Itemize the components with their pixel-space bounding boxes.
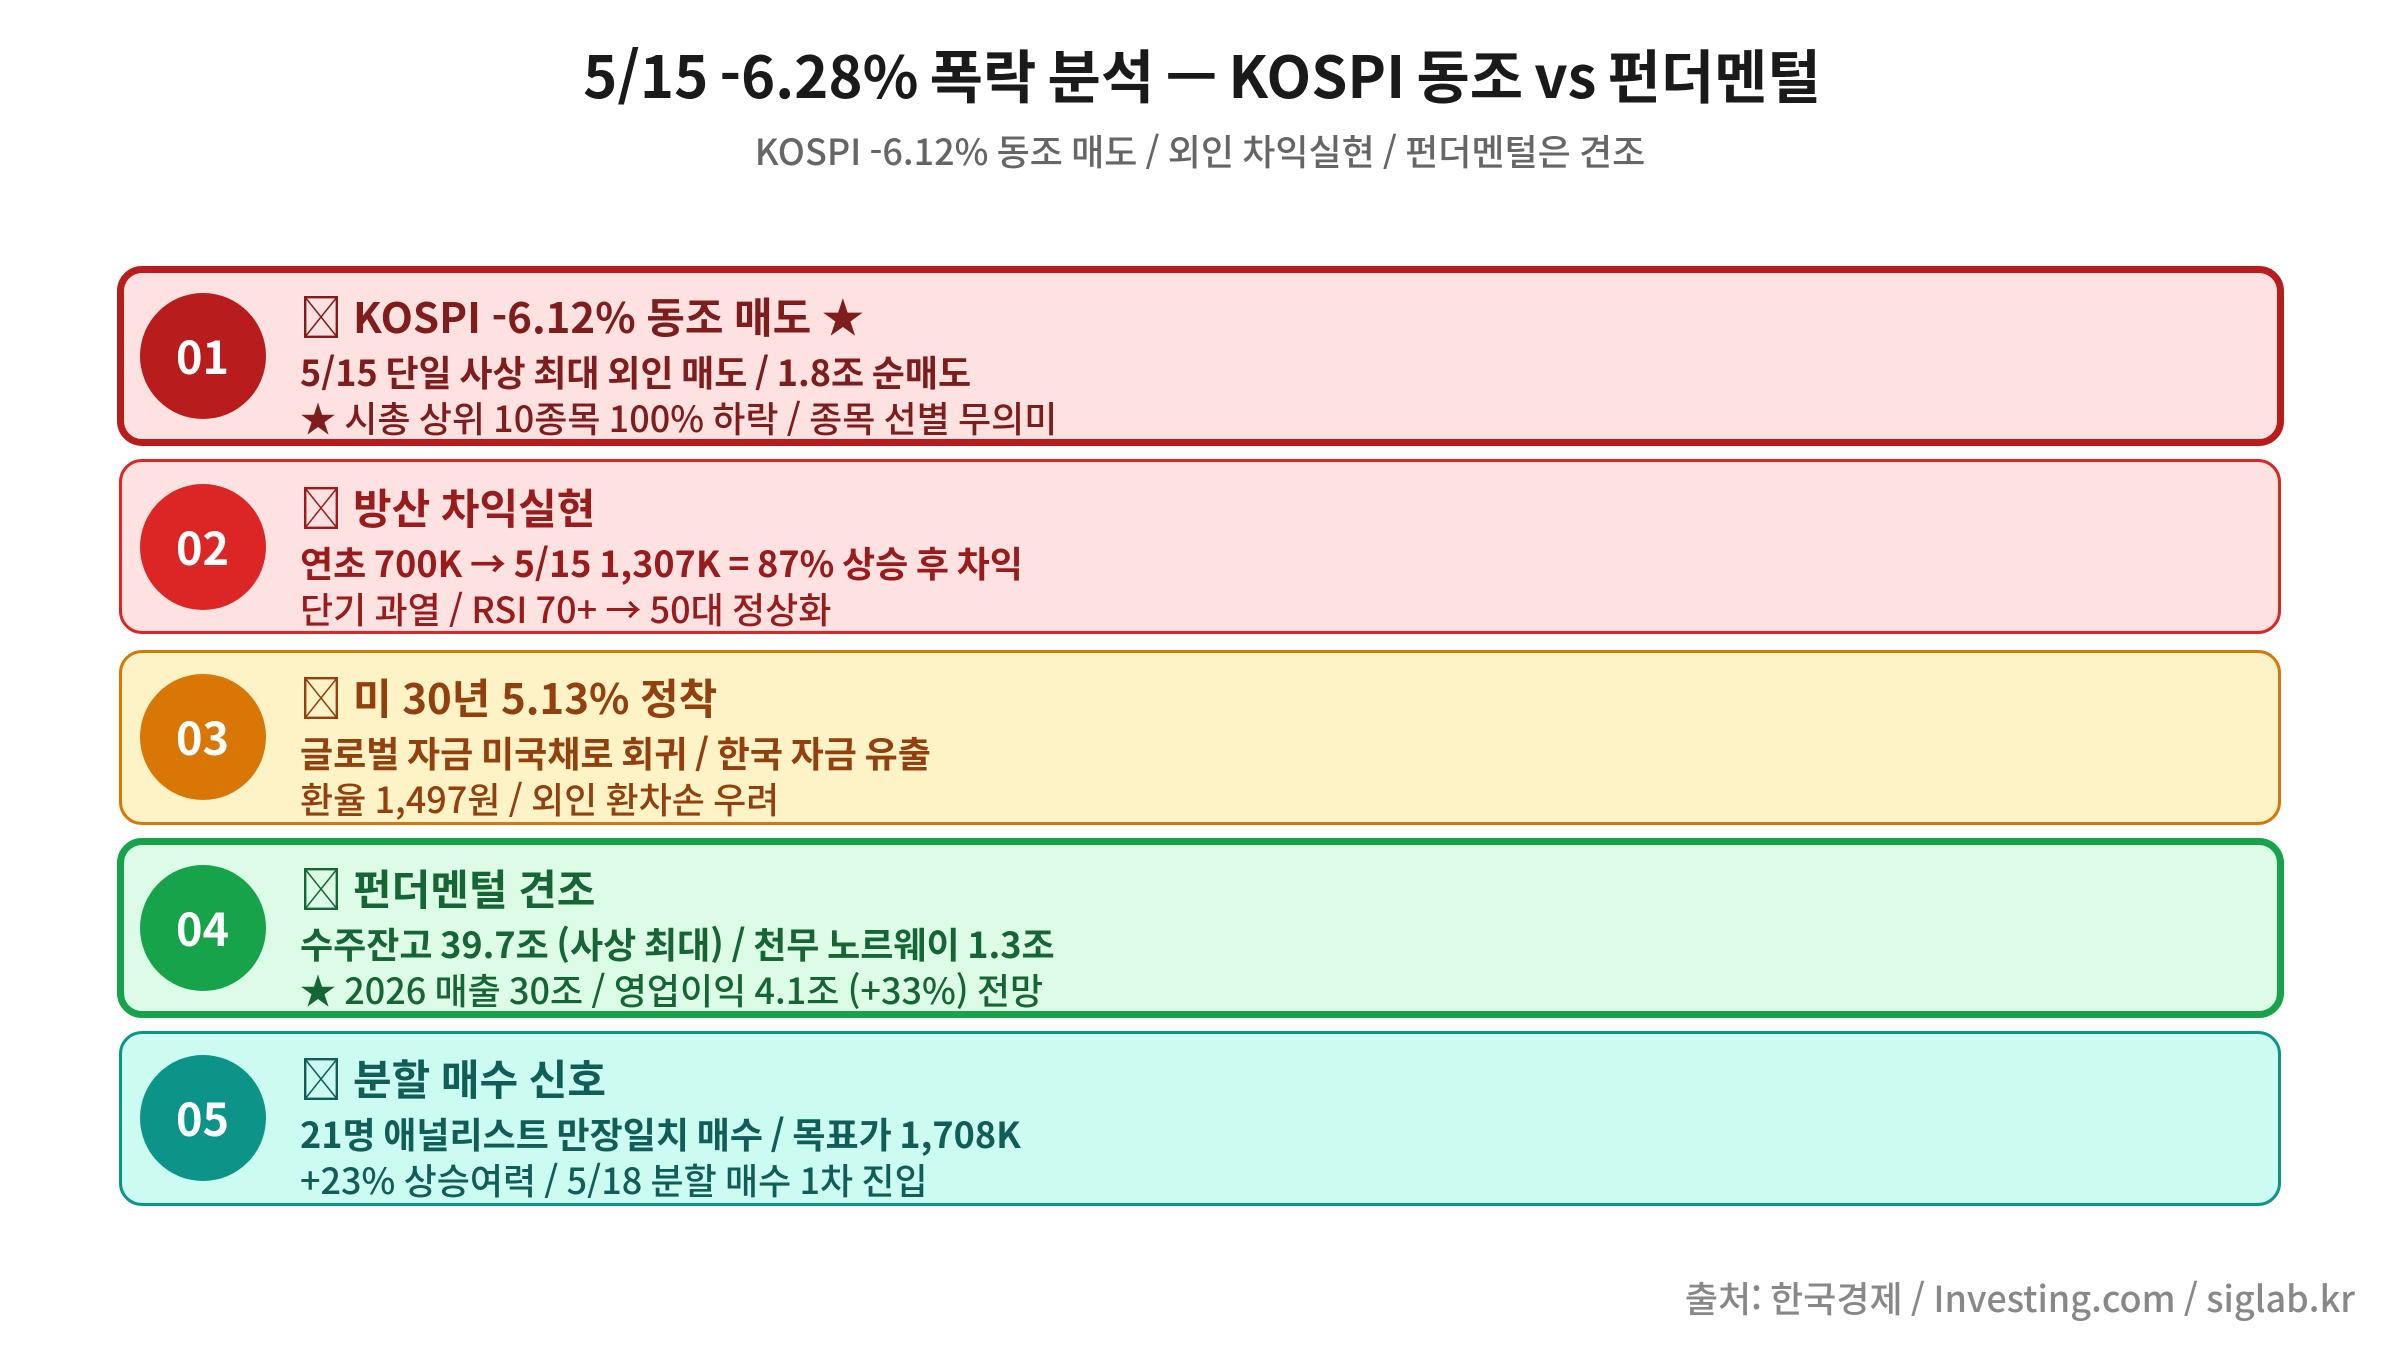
number badge 01: 01 (176, 322, 229, 387)
number badge 04 (140, 864, 266, 990)
icon: missing glyph box 01 (304, 296, 338, 338)
number badge 05 (140, 1055, 266, 1181)
note 05: +23% 상승여력 / 5/18 분할 매수 1차 진입 (300, 1153, 928, 1205)
note 01: ★ 시총 상위 10종목 100% 하락 / 종목 선별 무의미 (300, 391, 1057, 443)
title: 5/15 -6.28% 폭락 분석 — KOSPI 동조 vs 펀더멘털 (583, 31, 1821, 115)
number badge 03 (140, 674, 266, 800)
number badge 04: 04 (176, 894, 229, 958)
note 04: ★ 2026 매출 30조 / 영업이익 4.1조 (+33%) 전망 (300, 962, 1043, 1014)
detail 05: 21명 애널리스트 만장일치 매수 / 목표가 1,708K (300, 1107, 1021, 1159)
source footer: 출처: 한국경제 / Investing.com / siglab.kr (1685, 1271, 2355, 1323)
number badge 02: 02 (176, 512, 229, 578)
heading 05: 분할 매수 신호 (353, 1047, 606, 1108)
heading 03: 미 30년 5.13% 정착 (353, 666, 717, 727)
detail 02: 연초 700K → 5/15 1,307K = 87% 상승 후 차익 (300, 536, 1023, 588)
icon: missing glyph box 02 (304, 487, 338, 529)
panel: 05 buy signal (119, 1031, 2281, 1206)
number badge 02 (140, 484, 266, 610)
panel: 02 defense (119, 459, 2281, 634)
note 03: 환율 1,497원 / 외인 환차손 우려 (300, 772, 779, 824)
detail 03: 글로벌 자금 미국채로 회귀 / 한국 자금 유출 (300, 726, 931, 778)
number badge 03: 03 (176, 703, 229, 768)
icon: missing glyph box 04 (304, 868, 338, 910)
number badge 01 (140, 293, 266, 419)
panel: 03 treasury (119, 650, 2281, 825)
heading 04: 펀더멘털 견조 (353, 856, 595, 918)
heading 02: 방산 차익실현 (353, 476, 595, 536)
detail 01: 5/15 단일 사상 최대 외인 매도 / 1.8조 순매도 (300, 345, 971, 397)
panel: 04 fundamentals (117, 838, 2284, 1018)
heading 01: KOSPI -6.12% 동조 매도 ★ (353, 285, 864, 346)
number badge 05: 05 (176, 1084, 229, 1149)
note 02: 단기 과열 / RSI 70+ → 50대 정상화 (300, 582, 831, 634)
icon: missing glyph box 05 (304, 1058, 338, 1100)
subtitle: KOSPI -6.12% 동조 매도 / 외인 차익실현 / 펀더멘털은 견조 (755, 124, 1645, 176)
detail 04: 수주잔고 39.7조 (사상 최대) / 천무 노르웨이 1.3조 (300, 916, 1055, 968)
panel: 01 KOSPI (117, 266, 2284, 446)
icon: missing glyph box 03 (304, 677, 338, 719)
